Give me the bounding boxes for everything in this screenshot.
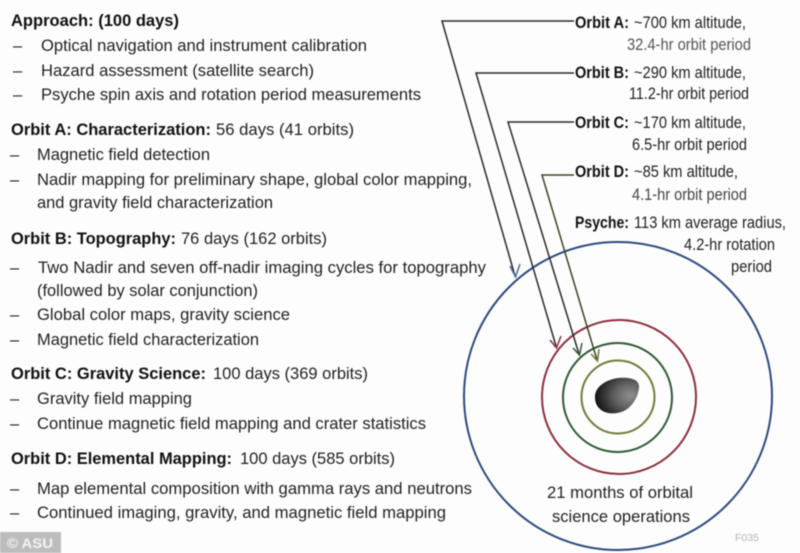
label: orbit B: Orbit B: bbox=[575, 64, 629, 82]
section: orbit A: – bbox=[10, 146, 20, 164]
section: orbit B: Global color maps, gravity science bbox=[37, 306, 290, 324]
section: orbit B: – bbox=[10, 259, 20, 277]
label: orbit A: 32.4-hr orbit period bbox=[627, 36, 751, 54]
section: orbit A: – bbox=[10, 171, 20, 189]
label: orbit A: Orbit A: bbox=[575, 14, 629, 32]
section: orbit D bbox=[10, 450, 472, 522]
caption: orbital operations: science operations bbox=[552, 508, 690, 526]
label: orbit B: ~290 km altitude, bbox=[634, 64, 746, 82]
label: orbit D bbox=[575, 163, 747, 204]
section: orbit B: Two Nadir and seven off-nadir imaging cycles for topography bbox=[38, 259, 487, 277]
arrow: orbit A bbox=[442, 21, 574, 277]
section: orbit B: Orbit B: Topography: bbox=[11, 230, 176, 248]
section: orbit B bbox=[10, 230, 487, 349]
section: orbit B: – bbox=[10, 306, 20, 324]
orbit diagram bbox=[464, 242, 772, 550]
section: orbit C bbox=[10, 365, 426, 433]
section: approach: – bbox=[13, 37, 23, 55]
label: orbit D: 4.1-hr orbit period bbox=[632, 186, 747, 204]
label: orbit D: ~85 km altitude, bbox=[634, 163, 738, 181]
section: orbit A: 56 days (41 orbits) bbox=[216, 121, 354, 139]
orbit D ring bbox=[582, 360, 654, 434]
section: approach bbox=[11, 12, 421, 104]
figure code: F035 bbox=[735, 533, 759, 544]
section: orbit D: Map elemental composition with gamma rays and neutrons bbox=[37, 480, 472, 498]
section: orbit C: 100 days (369 orbits) bbox=[213, 365, 368, 383]
orbit B ring bbox=[542, 320, 696, 474]
caption: orbital operations bbox=[547, 484, 693, 526]
arrow: orbit D bbox=[542, 175, 599, 361]
section: approach: Psyche spin axis and rotation period measurements bbox=[41, 86, 421, 104]
section: approach: Optical navigation and instrument calibration bbox=[41, 37, 367, 55]
label: orbit C: 6.5-hr orbit period bbox=[632, 136, 747, 154]
section: orbit B: 76 days (162 orbits) bbox=[181, 230, 327, 248]
credit: ASU: © ASU bbox=[7, 535, 53, 551]
section: orbit A: Orbit A: Characterization: bbox=[11, 121, 211, 139]
orbit A ring bbox=[464, 242, 772, 550]
section: orbit C: – bbox=[10, 390, 20, 408]
arrow: orbit B bbox=[476, 73, 574, 348]
section: orbit C: Gravity field mapping bbox=[37, 390, 192, 408]
label: orbit C bbox=[575, 114, 747, 154]
arrow: orbit C bbox=[508, 122, 582, 355]
caption: orbital operations: 21 months of orbital bbox=[547, 484, 693, 502]
label: Psyche bbox=[575, 214, 786, 276]
section: orbit A: Nadir mapping for preliminary shape, global color mapping, bbox=[37, 171, 472, 189]
section: orbit D: 100 days (585 orbits) bbox=[240, 450, 395, 468]
section: orbit A: Magnetic field detection bbox=[37, 146, 210, 164]
section: orbit D: Orbit D: Elemental Mapping: bbox=[11, 450, 232, 468]
section: orbit C: Continue magnetic field mapping and crater statistics bbox=[37, 415, 426, 433]
credit: ASU bbox=[0, 532, 61, 553]
section: approach: – bbox=[13, 62, 23, 80]
label: Psyche: Psyche: bbox=[575, 214, 629, 232]
section: orbit D: Continued imaging, gravity, and magnetic field mapping bbox=[37, 504, 446, 522]
section: orbit D: – bbox=[10, 504, 20, 522]
icon: Psyche asteroid bbox=[595, 378, 639, 413]
label: orbit C: Orbit C: bbox=[575, 114, 629, 132]
label: orbit D: Orbit D: bbox=[575, 163, 629, 181]
label: orbit C: ~170 km altitude, bbox=[634, 114, 746, 132]
label: Psyche: 4.2-hr rotation bbox=[684, 236, 775, 254]
section: approach: Approach: (100 days) bbox=[11, 12, 179, 30]
section: orbit C: Orbit C: Gravity Science: bbox=[11, 365, 206, 383]
orbit C ring bbox=[563, 343, 672, 452]
label: orbit A bbox=[575, 14, 751, 54]
section: orbit B: (followed by solar conjunction) bbox=[37, 282, 258, 300]
section: approach: Hazard assessment (satellite search) bbox=[41, 62, 314, 80]
section: orbit C: – bbox=[10, 415, 20, 433]
section: orbit A: and gravity field characterization bbox=[37, 194, 273, 212]
section: approach: – bbox=[13, 86, 23, 104]
section: orbit B: – bbox=[10, 331, 20, 349]
panel: mission phases bbox=[10, 12, 487, 522]
label: orbit B: 11.2-hr orbit period bbox=[629, 85, 749, 103]
section: orbit B: Magnetic field characterization bbox=[37, 331, 259, 349]
section: orbit D: – bbox=[10, 480, 20, 498]
label: orbit A: ~700 km altitude, bbox=[634, 14, 746, 32]
section: orbit A bbox=[10, 121, 472, 212]
label: Psyche: period bbox=[731, 258, 772, 276]
label: orbit B bbox=[575, 64, 749, 103]
